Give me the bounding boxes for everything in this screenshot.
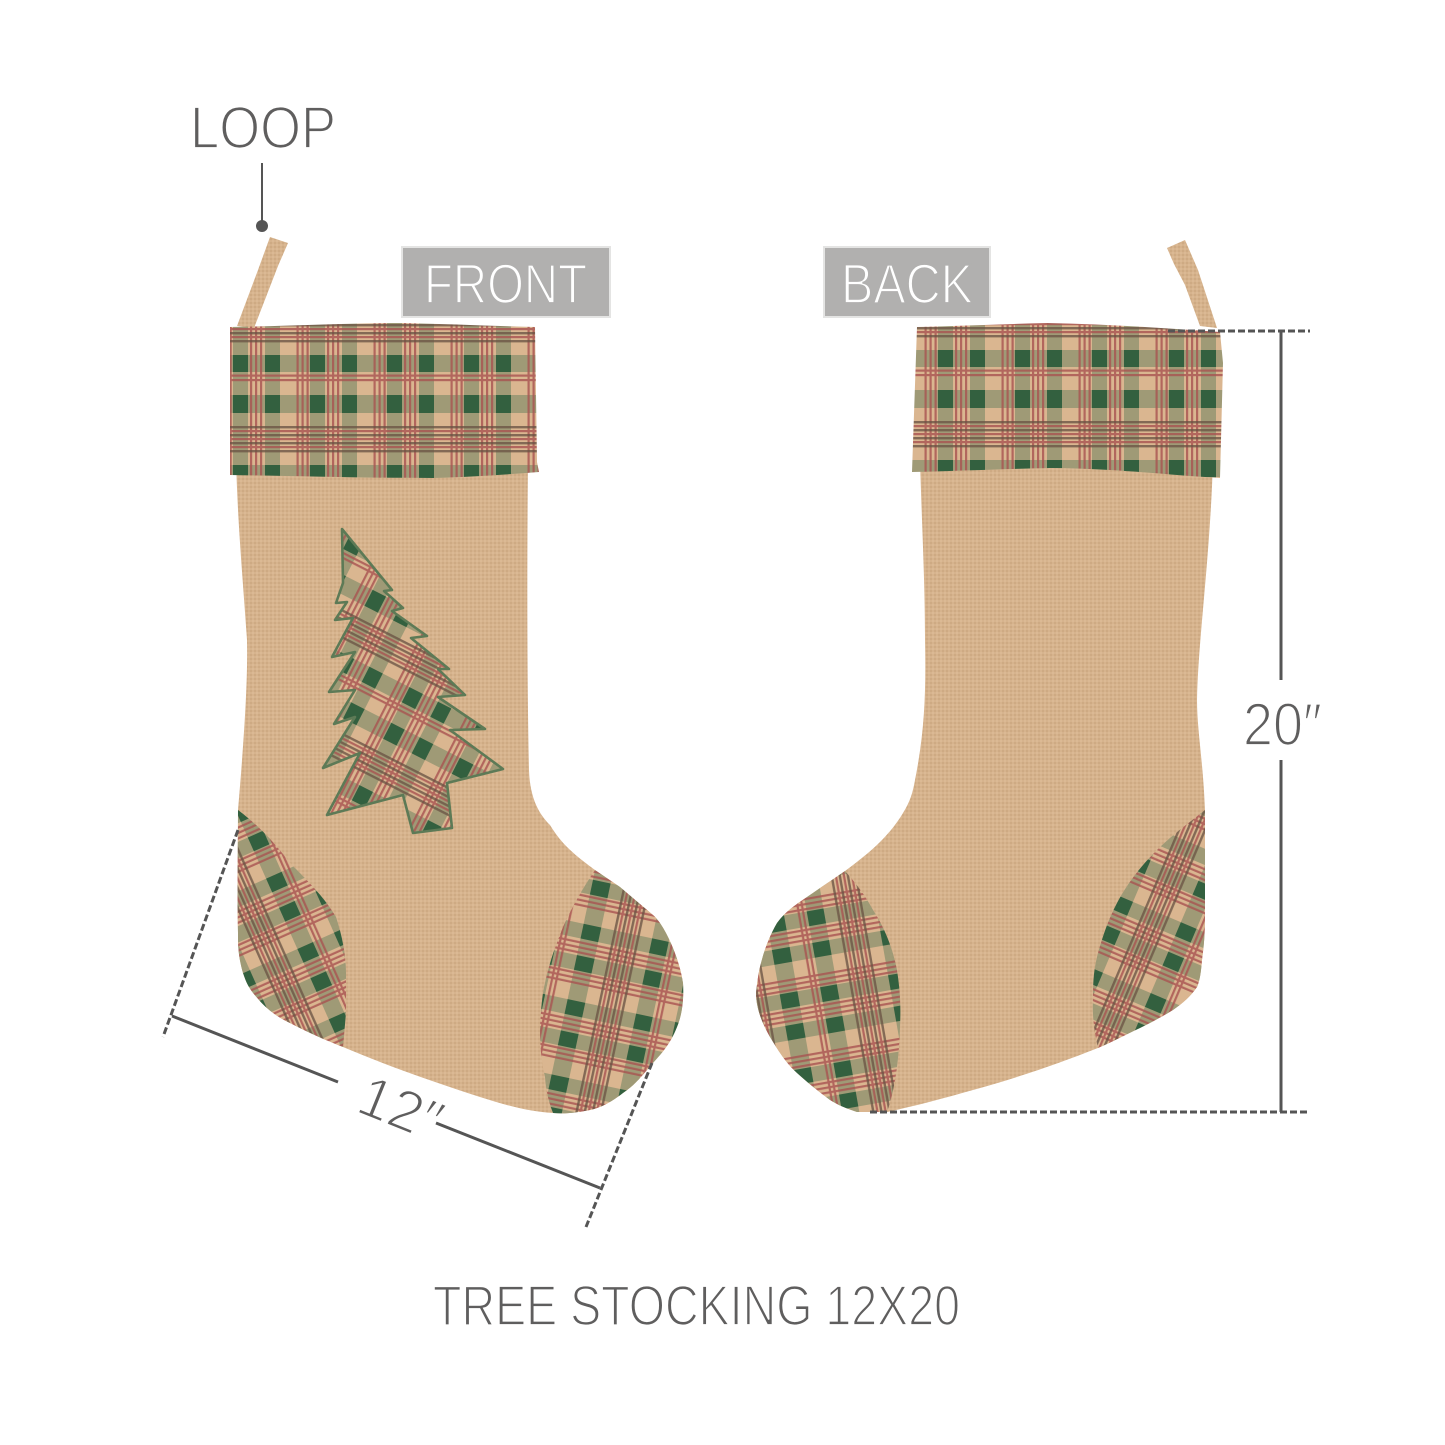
dimension: width 12 inches — [163, 830, 652, 1227]
loop leader line — [256, 163, 268, 232]
burlap body: back — [756, 460, 1213, 1112]
height value: 20″ — [1243, 691, 1322, 758]
cuff: front — [230, 323, 539, 478]
cuff: back — [912, 323, 1223, 478]
hanging loop: back — [1167, 240, 1217, 328]
label: loop — [190, 95, 336, 232]
tag: front: FRONT — [424, 252, 587, 315]
toe patch: front — [540, 870, 683, 1113]
width value: 12″ — [349, 1063, 452, 1155]
tag: back: BACK — [841, 252, 973, 315]
heel patch: front — [238, 810, 346, 1047]
heel patch: back — [1093, 810, 1205, 1048]
toe patch: back — [756, 871, 900, 1112]
loop label text: LOOP — [190, 95, 336, 161]
title: TREE STOCKING 12X20 — [433, 1274, 960, 1338]
stocking: back — [756, 240, 1223, 1112]
tree applique — [323, 529, 503, 833]
stocking: front — [230, 237, 683, 1113]
hanging loop: front — [237, 237, 288, 328]
burlap body: front — [236, 460, 683, 1113]
